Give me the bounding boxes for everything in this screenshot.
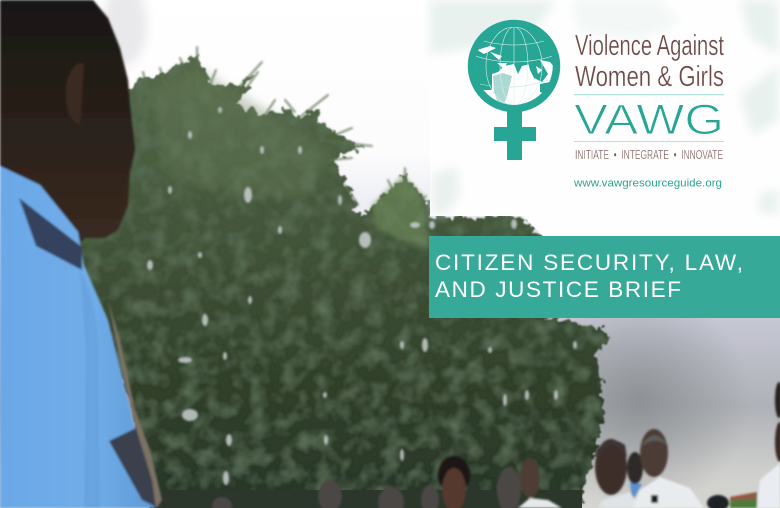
australia (540, 82, 550, 93)
website url: www.vawgresourceguide.org (573, 178, 722, 190)
storm cloud (520, 290, 780, 508)
rule above VAWG (574, 94, 724, 95)
stem (507, 108, 522, 160)
white land highlights (477, 46, 542, 74)
ring (472, 24, 556, 108)
panel background (430, 0, 780, 216)
crossbar (494, 127, 536, 141)
title text (435, 250, 743, 302)
police officer (0, 0, 162, 508)
tree base in shadow (150, 490, 582, 508)
southeast asia (528, 60, 548, 82)
upper teal landmass (475, 27, 553, 90)
grid lines on ocean (480, 80, 548, 87)
logo symbol: female sign with globe (470, 24, 558, 160)
crowd of people (212, 382, 780, 508)
wispy branch tips (143, 47, 426, 205)
shoulder strap cord (108, 300, 162, 508)
head (0, 0, 135, 245)
banner background (429, 236, 780, 318)
distant roof and hedge (730, 492, 757, 508)
acronym: VAWG (574, 96, 724, 144)
lighter foliage at upper crown (150, 70, 335, 200)
grey haze beside head (103, 0, 147, 65)
shirt (0, 166, 155, 508)
tree (60, 55, 612, 508)
title banner (429, 236, 780, 318)
lighter foliage at right crown (372, 175, 428, 245)
africa (493, 73, 512, 104)
sleeve fold (80, 270, 100, 508)
rule below VAWG (574, 141, 724, 142)
title text: AND JUSTICE BRIEF (435, 277, 681, 302)
sky gaps in the foliage (147, 107, 577, 485)
dark object (707, 495, 729, 508)
faint world map (430, 0, 778, 214)
sleeve strap (109, 428, 161, 508)
wordmark: Violence Against Women & Girls (575, 30, 724, 93)
man behind (627, 452, 643, 502)
background heads (212, 467, 521, 508)
globe (475, 27, 553, 105)
ear (66, 63, 84, 125)
officer at right edge (757, 382, 780, 508)
tall man in white shirt (632, 429, 704, 508)
shoulder strap (19, 198, 82, 270)
logo panel (430, 0, 780, 236)
title text: CITIZEN SECURITY, LAW, (435, 250, 743, 275)
man in white shirt (518, 458, 562, 508)
wordmark: Violence Against Women & Girls: Women & Girls (575, 61, 724, 93)
man in front (595, 439, 640, 508)
grid lines (475, 27, 553, 105)
woman (438, 456, 470, 508)
